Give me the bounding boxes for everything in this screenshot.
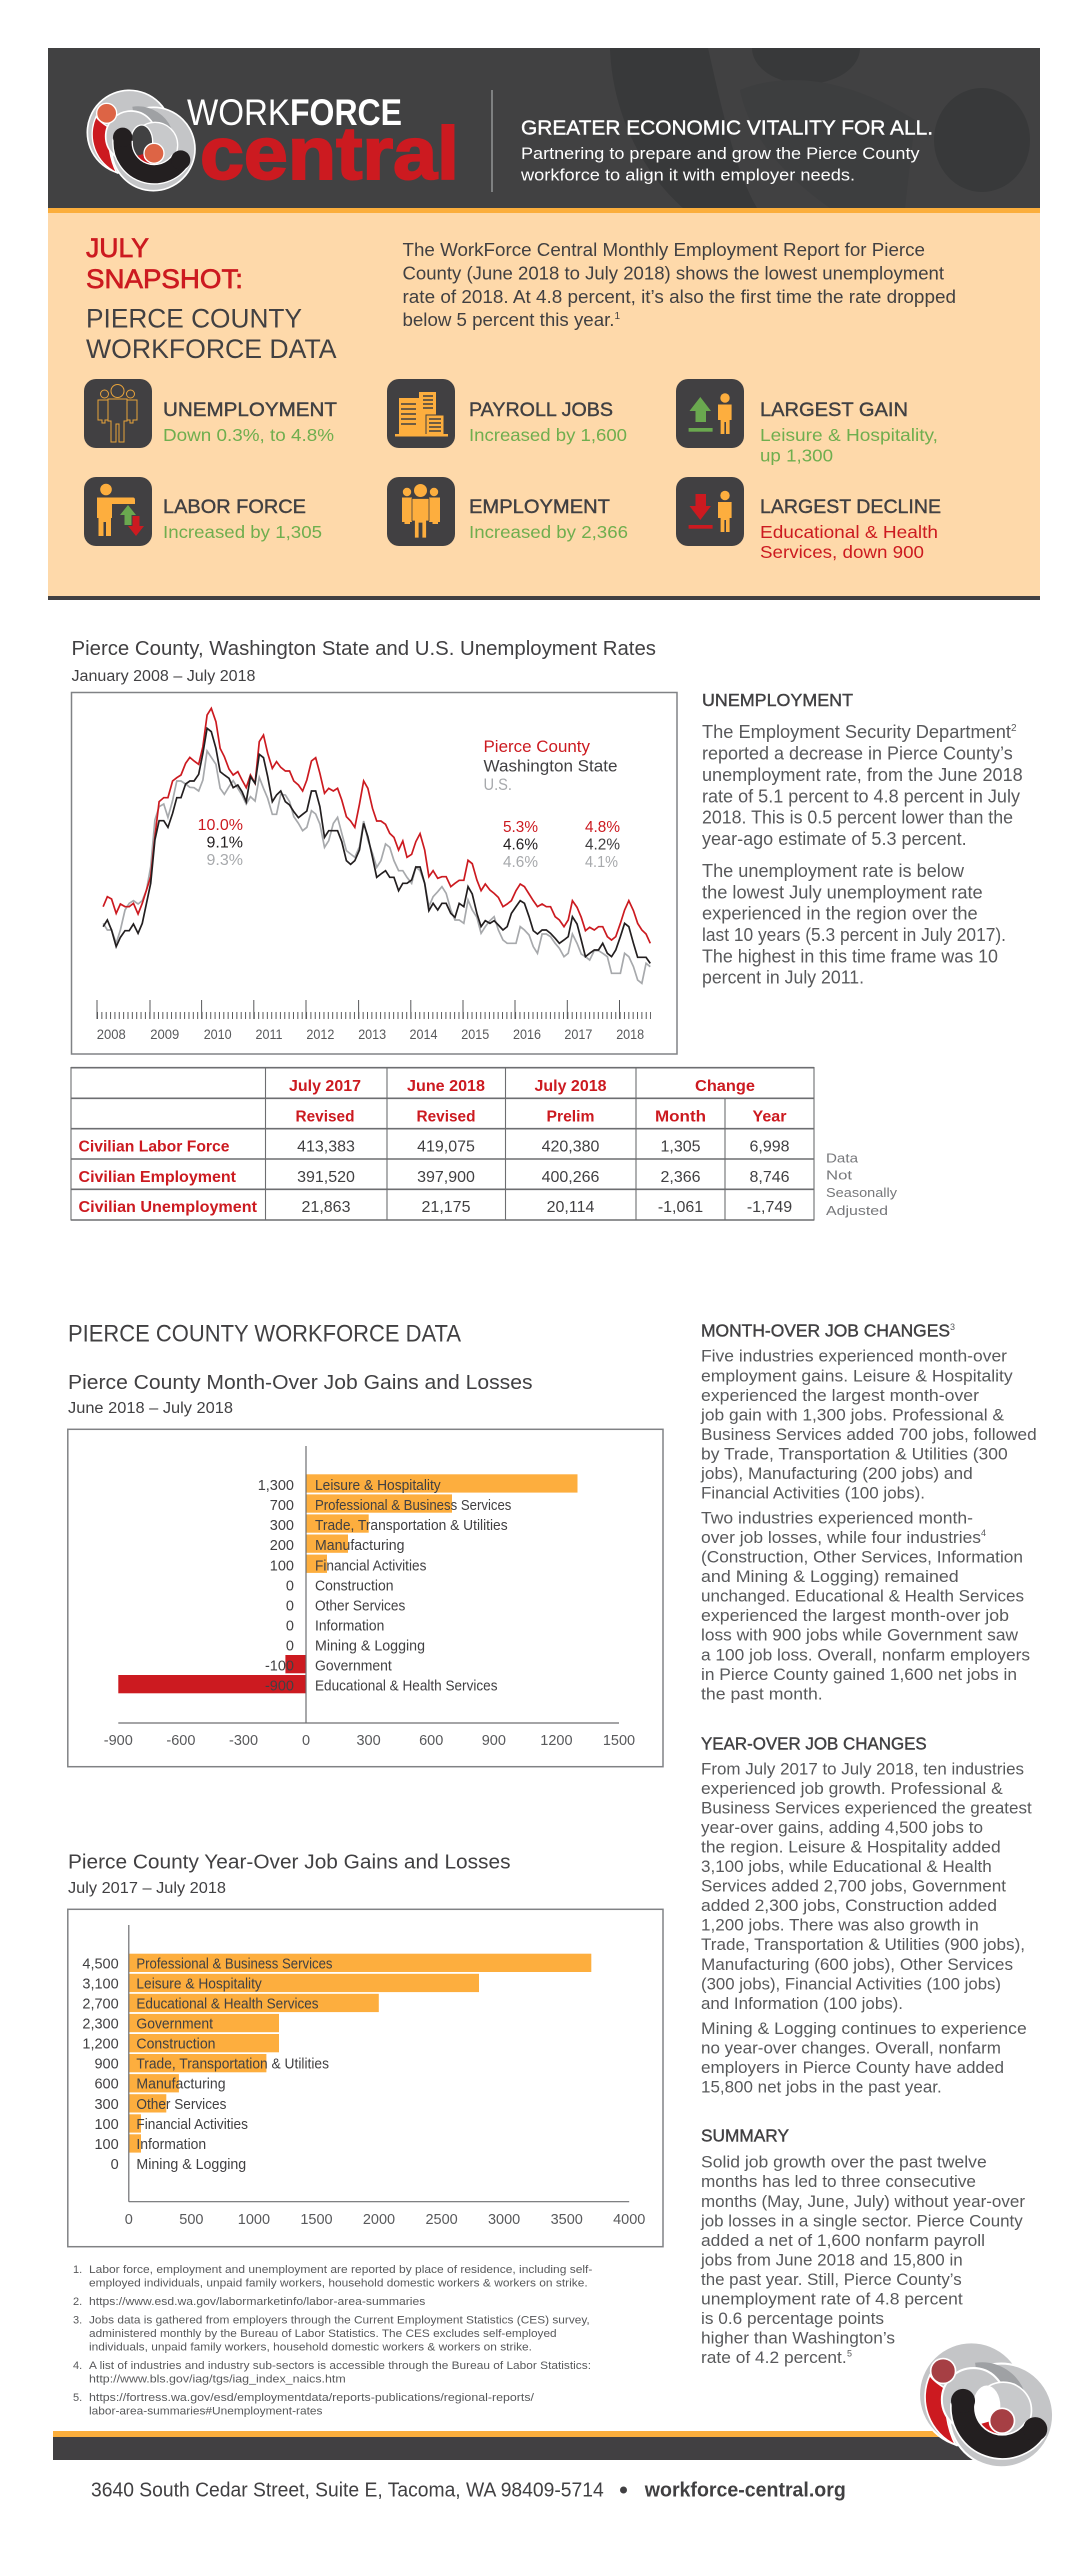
table values: -1,749 bbox=[747, 1199, 792, 1216]
industry labels: Manufacturing bbox=[136, 2077, 226, 2093]
x axis labels: 500 bbox=[179, 2212, 204, 2228]
chart legend: U.S. bbox=[484, 775, 512, 794]
text block: unemployment: The Employment Security Department bbox=[702, 722, 1011, 742]
text block: month-over job changes: Financial Activities (100 jobs). bbox=[701, 1484, 925, 1502]
line chart: unemployment rates bbox=[72, 692, 677, 1054]
stat: largest decline: Services, down 900 bbox=[760, 542, 924, 562]
x axis labels: -300 bbox=[229, 1733, 258, 1749]
rate callouts: 4.6% bbox=[503, 854, 538, 871]
footnotes: Jobs data is gathered from employers through the Current Employment Statistics (CES) survey, bbox=[89, 2315, 590, 2327]
stat: unemployment bbox=[163, 400, 337, 445]
industry labels: Information bbox=[136, 2137, 206, 2153]
rate callouts: 10.0% bbox=[198, 817, 243, 834]
icon: labor force bbox=[84, 477, 152, 546]
chart legend: Washington State bbox=[484, 756, 618, 776]
industry labels: Other Services bbox=[136, 2097, 226, 2113]
heading: year-over chart bbox=[68, 1851, 510, 1897]
bars bbox=[129, 1954, 591, 2153]
stat: payroll jobs bbox=[469, 400, 627, 445]
footnotes: 1. bbox=[73, 2264, 82, 2276]
icon: largest gain bbox=[676, 379, 744, 448]
text block: unemployment bbox=[702, 690, 1023, 988]
stat: largest gain: Leisure & Hospitality, bbox=[760, 425, 938, 445]
industry labels: Mining & Logging bbox=[136, 2157, 246, 2173]
value labels: 100 bbox=[94, 2137, 119, 2153]
footnotes: https://www.esd.wa.gov/labormarketinfo/labor-area-summaries bbox=[89, 2296, 426, 2308]
x axis labels: 900 bbox=[482, 1733, 506, 1749]
rate callouts: 9.3% bbox=[207, 852, 243, 869]
value labels bbox=[82, 1956, 119, 2173]
table values: 21,863 bbox=[302, 1199, 351, 1216]
heading: month-over chart: Pierce County Month-Over Job Gains and Losses bbox=[68, 1372, 532, 1394]
text block: year-over job changes bbox=[701, 1733, 1032, 2097]
text block: year-over job changes: Business Services experienced the greatest bbox=[701, 1798, 1032, 1817]
series: U.S. bbox=[103, 751, 650, 983]
table values: 420,380 bbox=[542, 1138, 600, 1156]
heading: month-over chart bbox=[68, 1372, 532, 1417]
text block: month-over job changes: loss with 900 jobs while Government saw bbox=[701, 1626, 1019, 1645]
bar chart: month-over job gains and losses bbox=[68, 1429, 663, 1767]
heading: unemployment rates chart: January 2008 – July 2018 bbox=[72, 668, 256, 685]
table row labels bbox=[78, 1138, 258, 1216]
footnotes: 5. bbox=[73, 2392, 82, 2404]
industry labels: Educational & Health Services bbox=[315, 1679, 498, 1695]
stat: employment bbox=[469, 497, 628, 542]
time axis: 2016 bbox=[513, 1026, 541, 1042]
text block: year-over job changes: employers in Pierce County have added bbox=[701, 2058, 1004, 2077]
table column headers: June 2018 bbox=[407, 1078, 485, 1095]
text block: summary: Solid job growth over the past twelve bbox=[701, 2153, 987, 2172]
rate callouts: 4.8% bbox=[585, 819, 620, 836]
text block: unemployment: The unemployment rate is below bbox=[702, 861, 965, 881]
table row labels: Civilian Labor Force bbox=[78, 1138, 230, 1156]
footnotes: administered monthly by the Bureau of Labor Statistics. The CES excludes self-employed bbox=[89, 2328, 557, 2340]
text block: year-over job changes: Services added 2,700 jobs, Government bbox=[701, 1877, 1006, 1896]
text block: month-over job changes: a 100 job loss. Overall, nonfarm employers bbox=[701, 1645, 1030, 1664]
footnotes: Labor force, employment and unemployment are reported by place of residence, including self- bbox=[89, 2264, 593, 2276]
text block: unemployment: experienced in the region over the bbox=[702, 904, 978, 924]
table values: 20,114 bbox=[547, 1199, 594, 1216]
text block: month-over job changes: by Trade, Transportation & Utilities (300 bbox=[701, 1444, 1008, 1463]
table column headers: July 2017 bbox=[289, 1078, 361, 1095]
value labels: 300 bbox=[270, 1518, 294, 1534]
table column headers: Revised bbox=[416, 1108, 476, 1126]
industry labels: Information bbox=[315, 1618, 384, 1634]
text block: unemployment: UNEMPLOYMENT bbox=[702, 690, 853, 710]
x axis labels: 0 bbox=[125, 2212, 133, 2228]
text block: year-over job changes: added 2,300 jobs, Construction added bbox=[701, 1896, 997, 1915]
industry labels: Construction bbox=[315, 1578, 394, 1594]
text block: month-over job changes: 4 bbox=[981, 1528, 986, 1538]
stat: labor force: LABOR FORCE bbox=[163, 497, 306, 518]
rate callouts bbox=[198, 817, 620, 871]
text block: month-over job changes: 3 bbox=[950, 1322, 955, 1332]
table values: 8,746 bbox=[749, 1169, 790, 1186]
value labels: 300 bbox=[94, 2097, 119, 2113]
text block: summary: jobs from June 2018 and 15,800 in bbox=[700, 2250, 963, 2269]
x axis labels: -600 bbox=[166, 1733, 195, 1749]
industry labels: Professional & Business Services bbox=[136, 1956, 332, 1972]
time axis: 2014 bbox=[410, 1026, 438, 1042]
text block: month-over job changes: MONTH-OVER JOB CHANGES bbox=[701, 1321, 950, 1341]
stat: largest decline bbox=[760, 497, 941, 562]
x axis labels: 3500 bbox=[551, 2212, 583, 2228]
icon: unemployment bbox=[84, 379, 152, 448]
heading: month-over chart: June 2018 – July 2018 bbox=[68, 1400, 233, 1417]
table values bbox=[297, 1138, 792, 1216]
snapshot heading: PIERCE COUNTY bbox=[86, 304, 302, 334]
stat: largest gain: up 1,300 bbox=[760, 446, 833, 466]
text block: summary: unemployment rate of 4.8 percent bbox=[701, 2290, 963, 2308]
industry labels: Government bbox=[315, 1659, 392, 1675]
table note: Data bbox=[826, 1150, 859, 1165]
heading: year-over chart: July 2017 – July 2018 bbox=[68, 1880, 226, 1897]
text block: year-over job changes: (300 jobs), Financial Activities (100 jobs) bbox=[701, 1974, 1001, 1993]
snapshot heading bbox=[86, 233, 336, 364]
text block: unemployment: rate of 5.1 percent to 4.8 percent in July bbox=[702, 786, 1020, 806]
table values: 419,075 bbox=[417, 1138, 475, 1156]
industry labels: Government bbox=[136, 2016, 213, 2032]
text block: month-over job changes: in Pierce County gained 1,600 net jobs in bbox=[701, 1665, 1017, 1684]
time axis: 2018 bbox=[616, 1026, 644, 1042]
time axis: 2015 bbox=[461, 1026, 489, 1042]
x axis labels: 3000 bbox=[488, 2212, 520, 2228]
table column headers: Prelim bbox=[546, 1108, 594, 1126]
text block: year-over job changes: Mining & Logging continues to experience bbox=[701, 2019, 1027, 2038]
table note: Seasonally bbox=[826, 1185, 898, 1200]
text block: year-over job changes: 3,100 jobs, while Educational & Health bbox=[701, 1857, 992, 1876]
text block: summary: months (May, June, July) without year-over bbox=[701, 2192, 1025, 2211]
industry labels: Trade, Transportation & Utilities bbox=[136, 2057, 329, 2073]
rate callouts: 4.6% bbox=[503, 836, 538, 854]
header tagline: workforce to align it with employer needs. bbox=[520, 166, 855, 184]
table column headers: July 2018 bbox=[534, 1078, 607, 1095]
heading: unemployment rates chart: Pierce County, Washington State and U.S. Unemployment Rates bbox=[72, 638, 656, 660]
time axis: 2010 bbox=[204, 1026, 232, 1042]
footer address: workforce-central.org bbox=[644, 2480, 846, 2502]
x axis labels: 600 bbox=[419, 1733, 443, 1749]
text block: month-over job changes: Two industries experienced month- bbox=[701, 1508, 973, 1527]
heading: year-over chart: Pierce County Year-Over Job Gains and Losses bbox=[68, 1851, 510, 1873]
industry labels: Educational & Health Services bbox=[136, 1996, 319, 2012]
heading: Pierce County workforce data: PIERCE COUNTY WORKFORCE DATA bbox=[68, 1321, 461, 1348]
x axis labels: 2000 bbox=[363, 2212, 395, 2228]
heading: unemployment rates chart bbox=[72, 638, 656, 685]
industry labels: Leisure & Hospitality bbox=[136, 1976, 263, 1992]
rate callouts: 5.3% bbox=[503, 819, 538, 836]
text block: year-over job changes: and Information (100 jobs). bbox=[701, 1994, 903, 2013]
text block: year-over job changes: Manufacturing (600 jobs), Other Services bbox=[701, 1955, 1013, 1974]
value labels: 1,300 bbox=[258, 1478, 294, 1494]
bar chart: year-over job gains and losses bbox=[68, 1909, 663, 2247]
stat: unemployment: UNEMPLOYMENT bbox=[163, 400, 337, 421]
stat: largest decline: Educational & Health bbox=[760, 522, 938, 542]
time axis: 2017 bbox=[564, 1026, 593, 1042]
chart legend bbox=[484, 737, 618, 794]
stat: largest gain bbox=[760, 400, 938, 466]
snapshot heading: WORKFORCE DATA bbox=[86, 334, 336, 364]
header tagline bbox=[520, 116, 933, 184]
bars bbox=[118, 1474, 578, 1693]
stat: largest decline: LARGEST DECLINE bbox=[760, 497, 941, 518]
text block: year-over job changes: From July 2017 to July 2018, ten industries bbox=[701, 1759, 1024, 1778]
value labels: 0 bbox=[286, 1598, 294, 1614]
stat: payroll jobs: Increased by 1,600 bbox=[469, 425, 627, 445]
stat: employment: EMPLOYMENT bbox=[469, 497, 610, 518]
value labels: 900 bbox=[94, 2057, 119, 2073]
table column headers bbox=[289, 1078, 786, 1126]
table values: 2,366 bbox=[660, 1169, 701, 1186]
time axis bbox=[97, 1000, 651, 1042]
industry labels: Leisure & Hospitality bbox=[315, 1478, 441, 1494]
text block: year-over job changes: experienced job growth. Professional & bbox=[701, 1779, 1003, 1798]
rate callouts: 9.1% bbox=[207, 834, 243, 852]
footnotes: http://www.bls.gov/iag/tgs/iag_index_naics.htm bbox=[89, 2373, 346, 2385]
industry labels: Financial Activities bbox=[315, 1558, 426, 1574]
header tagline: Partnering to prepare and grow the Pierce County bbox=[521, 144, 920, 163]
text block: year-over job changes: 15,800 net jobs in the past year. bbox=[701, 2078, 942, 2097]
stat: labor force: Increased by 1,305 bbox=[163, 522, 322, 542]
rate callouts: 4.1% bbox=[585, 854, 618, 871]
footnotes: labor-area-summaries#Unemployment-rates bbox=[89, 2405, 323, 2417]
stat: unemployment: Down 0.3%, to 4.8% bbox=[163, 425, 334, 445]
text block: month-over job changes: employment gains. Leisure & Hospitality bbox=[701, 1366, 1013, 1385]
footnotes: 2. bbox=[73, 2296, 82, 2308]
text block: year-over job changes: 1,200 jobs. There was also growth in bbox=[701, 1916, 979, 1935]
footnotes: employed individuals, unpaid family workers, household domestic workers & workers on strike. bbox=[89, 2277, 588, 2289]
value labels: 0 bbox=[286, 1618, 294, 1634]
table row labels: Civilian Unemployment bbox=[78, 1199, 258, 1216]
table values: 391,520 bbox=[297, 1169, 355, 1186]
industry labels bbox=[136, 1956, 332, 2173]
value labels: -900 bbox=[265, 1679, 294, 1695]
value labels bbox=[258, 1478, 294, 1695]
text block: month-over job changes: (Construction, Other Services, Information bbox=[701, 1548, 1023, 1567]
table column headers: Year bbox=[752, 1108, 786, 1126]
snapshot intro paragraph: County (June 2018 to July 2018) shows the lowest unemployment bbox=[402, 264, 944, 284]
text block: month-over job changes bbox=[700, 1321, 1037, 1703]
industry labels: Financial Activities bbox=[136, 2117, 248, 2133]
icon: employment bbox=[387, 477, 455, 546]
text block: unemployment: the lowest July unemployment rate bbox=[702, 882, 983, 902]
table column headers: Revised bbox=[296, 1108, 354, 1126]
snapshot intro paragraph bbox=[402, 240, 956, 330]
value labels: 0 bbox=[286, 1578, 294, 1594]
footer band bbox=[53, 2431, 1021, 2460]
data table bbox=[71, 1067, 814, 1220]
footer address: 3640 South Cedar Street, Suite E, Tacoma, WA 98409-5714 bbox=[91, 2480, 604, 2502]
footnotes: A list of industries and industry sub-sectors is accessible through the Bureau of Labor Statistics: bbox=[89, 2360, 591, 2372]
x axis labels bbox=[104, 1733, 635, 1749]
text block: month-over job changes: Five industries experienced month-over bbox=[701, 1347, 1007, 1366]
stat: employment: Increased by 2,366 bbox=[469, 522, 628, 542]
text block: unemployment: reported a decrease in Pierce County’s bbox=[702, 744, 1013, 764]
text block: summary: months has led to three consecutive bbox=[701, 2172, 976, 2191]
table values: 413,383 bbox=[297, 1138, 355, 1156]
text block: year-over job changes: no year-over changes. Overall, nonfarm bbox=[701, 2038, 1001, 2058]
time axis: 2011 bbox=[256, 1026, 283, 1042]
x axis labels: 1000 bbox=[238, 2212, 270, 2228]
x axis labels: -900 bbox=[104, 1733, 133, 1749]
text block: summary: is 0.6 percentage points bbox=[701, 2309, 884, 2328]
value labels: 100 bbox=[94, 2117, 119, 2133]
table values: 397,900 bbox=[417, 1169, 475, 1186]
table values: 6,998 bbox=[749, 1138, 790, 1156]
x axis labels: 0 bbox=[302, 1733, 310, 1749]
table note: Adjusted bbox=[826, 1203, 888, 1218]
table note: Not bbox=[826, 1168, 852, 1183]
snapshot intro paragraph: rate of 2018. At 4.8 percent, it’s also the first time the rate dropped bbox=[402, 287, 956, 307]
text block: summary: added a net of 1,600 nonfarm payroll bbox=[701, 2231, 985, 2250]
text block: unemployment: unemployment rate, from the June 2018 bbox=[702, 765, 1023, 785]
logo: WorkForce Central mark bbox=[87, 90, 195, 191]
table row labels: Civilian Employment bbox=[78, 1169, 237, 1186]
table values: 1,305 bbox=[660, 1138, 701, 1156]
icon: payroll jobs bbox=[387, 379, 455, 448]
text block: month-over job changes: and Mining & Logging) remained bbox=[701, 1567, 959, 1586]
series: Pierce County bbox=[103, 708, 650, 943]
time axis: 2009 bbox=[150, 1026, 179, 1042]
x axis labels: 1500 bbox=[603, 1733, 635, 1749]
text block: year-over job changes: the region. Leisure & Hospitality added bbox=[701, 1838, 1001, 1856]
table values: 21,175 bbox=[422, 1199, 471, 1216]
text block: summary: rate of 4.2 percent. bbox=[701, 2348, 847, 2367]
stat: largest gain: LARGEST GAIN bbox=[760, 400, 908, 421]
text block: month-over job changes: the past month. bbox=[701, 1684, 823, 1703]
value labels: 4,500 bbox=[82, 1956, 119, 1972]
panel: July snapshot bbox=[48, 213, 1040, 600]
text block: unemployment: year-ago estimate of 5.3 percent. bbox=[702, 829, 967, 849]
text block: unemployment: 2018. This is 0.5 percent lower than the bbox=[702, 808, 1013, 828]
footnotes: 3. bbox=[73, 2315, 82, 2327]
value labels: 2,300 bbox=[82, 2016, 119, 2032]
time axis: 2008 bbox=[97, 1026, 126, 1042]
snapshot heading: JULY bbox=[86, 233, 149, 263]
snapshot intro paragraph: The WorkForce Central Monthly Employment Report for Pierce bbox=[402, 240, 925, 260]
text block: month-over job changes: unchanged. Educational & Health Services bbox=[701, 1587, 1024, 1606]
logo wordmark: central bbox=[200, 112, 459, 195]
text block: month-over job changes: experienced the largest month-over bbox=[701, 1386, 979, 1405]
value labels: 1,200 bbox=[82, 2037, 119, 2053]
text block: year-over job changes: year-over gains, adding 4,500 jobs to bbox=[701, 1818, 983, 1837]
footnotes: https://fortress.wa.gov/esd/employmentdata/reports-publications/regional-reports/ bbox=[89, 2392, 535, 2404]
value labels: 3,100 bbox=[82, 1976, 119, 1992]
text block: year-over job changes: Trade, Transportation & Utilities (900 jobs), bbox=[701, 1935, 1025, 1954]
table values: -1,061 bbox=[658, 1199, 703, 1216]
x axis labels: 1500 bbox=[300, 2212, 333, 2228]
text block: unemployment: last 10 years (5.3 percent in July 2017). bbox=[702, 925, 1006, 945]
text block: summary: SUMMARY bbox=[701, 2126, 789, 2146]
value labels: 600 bbox=[94, 2077, 119, 2093]
text block: unemployment: The highest in this time frame was 10 bbox=[702, 946, 998, 966]
text block: month-over job changes: job gain with 1,300 jobs. Professional & bbox=[700, 1405, 1005, 1424]
value labels: 200 bbox=[270, 1538, 294, 1554]
text block: summary: the past year. Still, Pierce County’s bbox=[701, 2270, 962, 2289]
text block: month-over job changes: jobs), Manufacturing (200 jobs) and bbox=[700, 1464, 973, 1483]
value labels: 100 bbox=[270, 1558, 294, 1574]
value labels: 700 bbox=[270, 1498, 294, 1514]
snapshot intro paragraph: 1 bbox=[614, 311, 620, 322]
series: Washington State bbox=[103, 728, 650, 963]
footnotes bbox=[73, 2264, 593, 2417]
text block: month-over job changes: over job losses, while four industries bbox=[701, 1528, 981, 1547]
header tagline: GREATER ECONOMIC VITALITY FOR ALL. bbox=[521, 116, 933, 140]
industry labels: Other Services bbox=[315, 1598, 405, 1614]
logo wordmark: WORK bbox=[187, 92, 290, 133]
value labels: -100 bbox=[265, 1659, 294, 1675]
table note bbox=[826, 1150, 898, 1218]
rate callouts: 4.2% bbox=[585, 836, 620, 854]
text block: month-over job changes: Business Services added 700 jobs, followed bbox=[701, 1425, 1037, 1444]
x axis labels: 300 bbox=[356, 1733, 381, 1749]
header banner bbox=[48, 48, 1040, 213]
footnotes: individuals, unpaid family workers, household domestic workers & workers on strike. bbox=[89, 2341, 532, 2353]
snapshot heading: SNAPSHOT: bbox=[86, 264, 243, 294]
x axis labels bbox=[125, 2212, 645, 2228]
logo: footer mark bbox=[919, 2342, 1053, 2467]
x axis labels: 1200 bbox=[540, 1733, 573, 1749]
value labels: 2,700 bbox=[82, 1996, 119, 2012]
value labels: 0 bbox=[111, 2157, 119, 2173]
text block: unemployment: 2 bbox=[1011, 723, 1017, 734]
footnotes: 4. bbox=[73, 2360, 82, 2372]
text block: summary: job losses in a single sector. Pierce County bbox=[700, 2211, 1023, 2230]
table column headers: Month bbox=[655, 1108, 706, 1126]
industry labels bbox=[315, 1478, 511, 1695]
table column headers: Change bbox=[695, 1078, 755, 1095]
text block: month-over job changes: experienced the largest month-over job bbox=[701, 1606, 1009, 1625]
text block: year-over job changes: YEAR-OVER JOB CHANGES bbox=[701, 1733, 927, 1753]
stat: labor force bbox=[163, 497, 322, 542]
table values: 400,266 bbox=[542, 1169, 600, 1186]
x axis labels: 4000 bbox=[613, 2212, 645, 2228]
snapshot intro paragraph: below 5 percent this year. bbox=[402, 310, 614, 330]
logo wordmark: FORCE bbox=[290, 92, 402, 133]
stat: payroll jobs: PAYROLL JOBS bbox=[469, 400, 613, 421]
icon: largest decline bbox=[676, 477, 744, 546]
text block: summary: higher than Washington’s bbox=[701, 2329, 895, 2348]
industry labels: Mining & Logging bbox=[315, 1639, 425, 1655]
industry labels: Professional & Business Services bbox=[315, 1498, 511, 1514]
industry labels: Construction bbox=[136, 2037, 216, 2053]
time axis: 2012 bbox=[306, 1026, 335, 1042]
industry labels: Trade, Transportation & Utilities bbox=[315, 1518, 508, 1534]
text block: summary: 5 bbox=[847, 2348, 852, 2358]
text block: summary bbox=[700, 2126, 1025, 2367]
industry labels: Manufacturing bbox=[315, 1538, 404, 1554]
x axis labels: 2500 bbox=[425, 2212, 458, 2228]
time axis: 2013 bbox=[358, 1026, 386, 1042]
text block: unemployment: percent in July 2011. bbox=[702, 968, 864, 988]
value labels: 0 bbox=[286, 1639, 294, 1655]
chart legend: Pierce County bbox=[484, 737, 590, 756]
